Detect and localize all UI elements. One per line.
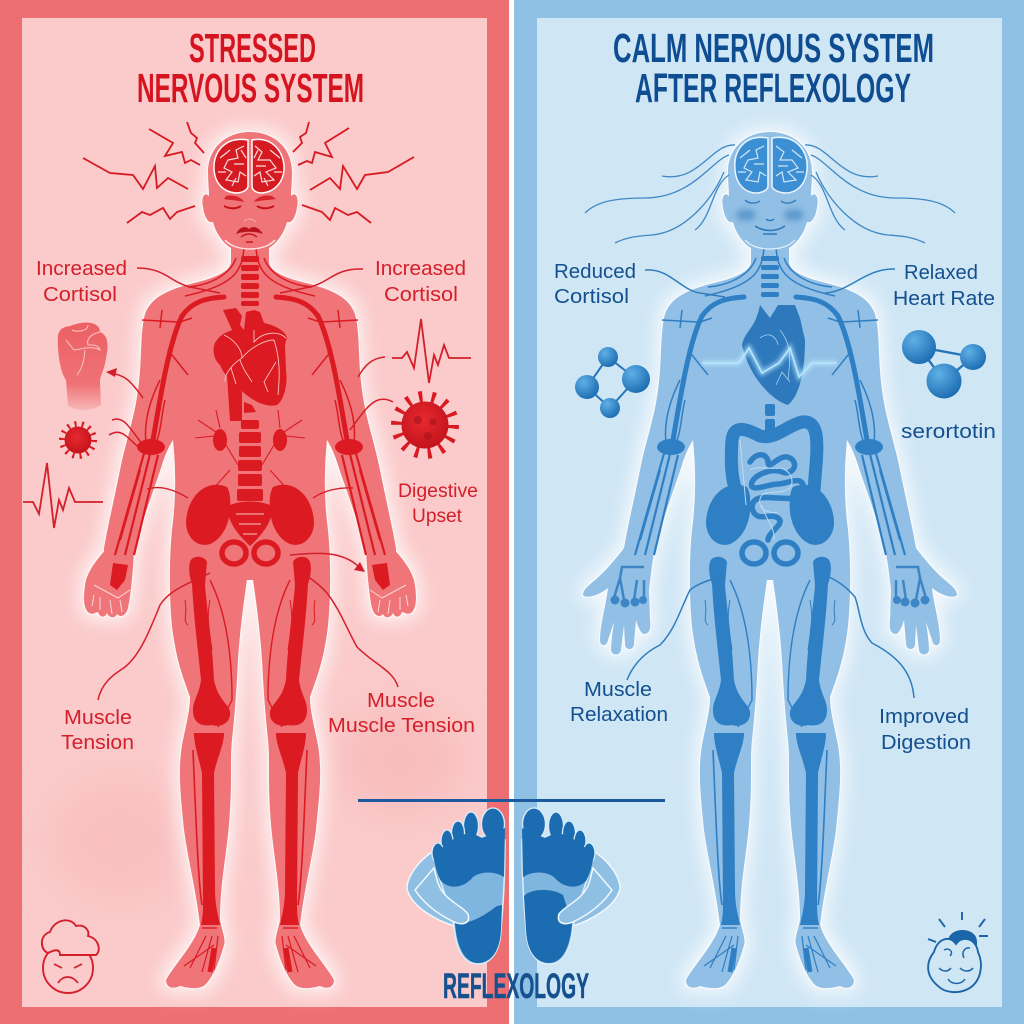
chart: ECG left (23, 463, 103, 528)
right heel (524, 868, 612, 963)
label: increased cortisol left (36, 257, 127, 306)
label: digestive upset: Upset (412, 506, 463, 527)
label: increased cortisol right (375, 257, 466, 306)
label: improved digestion: Improved (879, 705, 969, 728)
label: increased cortisol left: Increased (36, 257, 127, 280)
icon: right foot with hand (522, 808, 620, 964)
label: increased cortisol right: Cortisol (384, 283, 458, 306)
panel: blue outer background (514, 0, 1024, 1024)
label: muscle tension right: Muscle (367, 689, 435, 712)
icon: calm heart (742, 305, 805, 405)
digestive leader lines (147, 488, 353, 498)
label: serotonin: serortotin (901, 420, 996, 443)
label: muscle tension right: Muscle Tension (328, 714, 475, 737)
icon: small virus (62, 424, 94, 456)
icon: stressed brain (214, 139, 284, 193)
label: muscle tension left: Muscle (64, 706, 132, 729)
leader lines: blue panel (627, 269, 914, 698)
icon: anatomical heart (214, 308, 287, 421)
figure: calm body (583, 132, 957, 988)
rule above reflexology (358, 799, 665, 802)
divider: white central gap (509, 0, 514, 1024)
neck vertebrae and spine (213, 256, 287, 546)
icon: sad face with cloud (42, 920, 99, 993)
icon: calm face with sun (928, 912, 988, 992)
label: reflexology: REFLEXOLOGY (443, 967, 589, 1006)
label: relaxed heart rate: Relaxed (904, 261, 978, 284)
panel: blue inner background (537, 18, 1002, 1007)
label: digestive upset: Digestive (398, 481, 478, 502)
title: stressed nervous system: STRESSED (189, 25, 316, 71)
title: stressed nervous system: NERVOUS SYSTEM (137, 65, 364, 111)
sacrum highlights (236, 514, 264, 534)
icon: intestines (731, 422, 817, 540)
label: muscle tension left (61, 706, 134, 754)
panel: red outer background (0, 0, 509, 1024)
face: stressed (224, 195, 276, 249)
label: increased cortisol right: Increased (375, 257, 466, 280)
figure: stressed body (84, 132, 416, 988)
label: reduced cortisol: Reduced (554, 260, 636, 283)
label: improved digestion: Digestion (881, 731, 971, 754)
blue body silhouette (583, 132, 957, 988)
face: calm (736, 200, 804, 249)
label: muscle relaxation (570, 678, 668, 726)
label: increased cortisol left: Cortisol (43, 283, 117, 306)
label: muscle tension right (328, 689, 475, 737)
title: stressed nervous system (137, 25, 364, 111)
limb anatomy (92, 248, 408, 972)
limb anatomy (635, 248, 905, 972)
red body silhouette (84, 132, 416, 988)
calm energy waves (585, 145, 955, 243)
arrow: to fist (106, 368, 143, 398)
chart: calm ECG across heart (702, 348, 837, 377)
kidney vessels (195, 410, 305, 490)
icon: clenched fist (58, 323, 108, 410)
label: muscle tension left: Tension (61, 731, 134, 754)
left heel (415, 868, 502, 963)
label: reduced cortisol (554, 260, 636, 308)
label: reduced cortisol: Cortisol (554, 285, 629, 308)
label: muscle relaxation: Muscle (584, 678, 652, 701)
icon: right molecule (902, 330, 986, 398)
label: improved digestion (879, 705, 971, 754)
leader lines: red panel (98, 268, 398, 700)
icon: left molecule (575, 347, 650, 418)
title: calm nervous system (613, 25, 934, 111)
icon: stress lightning bolts (83, 122, 414, 223)
icon: large virus (397, 397, 453, 453)
label: muscle relaxation: Relaxation (570, 703, 668, 726)
panel: red inner background (22, 18, 487, 1007)
neck vertebrae (761, 256, 779, 433)
arrow: to right hand (290, 553, 365, 572)
icon: left foot with hand (407, 808, 505, 964)
label: digestive upset (398, 481, 478, 527)
hand bones (611, 567, 929, 607)
label: relaxed heart rate (893, 261, 995, 310)
chart: ECG right (392, 319, 471, 383)
label: relaxed heart rate: Heart Rate (893, 287, 995, 310)
icon: calm brain (735, 137, 807, 193)
